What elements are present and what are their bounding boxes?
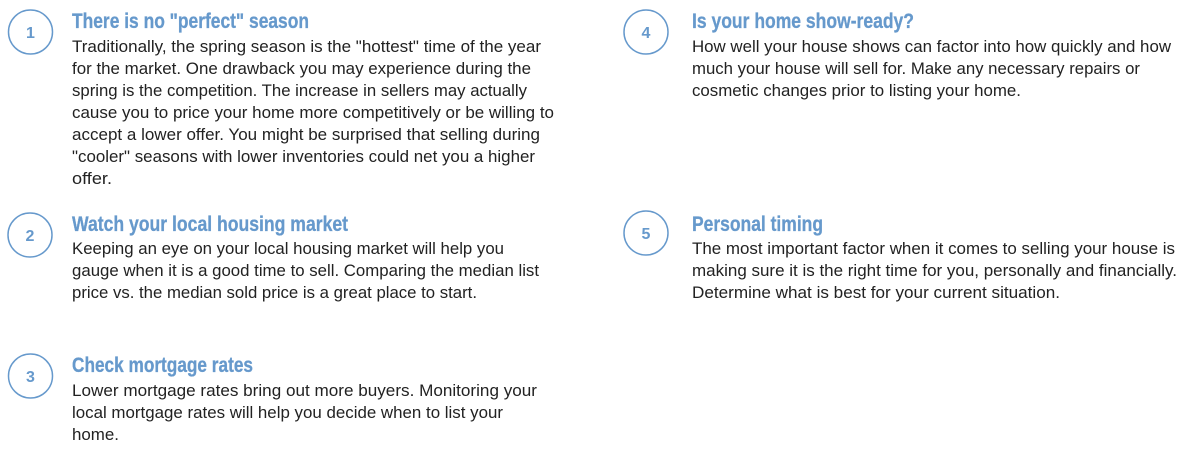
text block: tip 1: offer. (72, 170, 112, 188)
text block: tip 1: cause you to price your home more competitively or be willing to (72, 104, 554, 122)
text block: tip 4 (692, 38, 1171, 100)
icon: number 3 badge: 3 (26, 369, 35, 386)
text block: tip 5: The most important factor when it comes to selling your house is (692, 240, 1175, 258)
panel: tip 5 (624, 211, 1177, 302)
icon: number 3 badge (8, 354, 52, 398)
text block: tip 2: price vs. the median sold price is a great place to start. (72, 284, 477, 302)
text block: tip 1 (72, 38, 554, 188)
text block: tip 1: spring is the competition. The increase in sellers may actually (72, 82, 528, 100)
text block: tip 2: gauge when it is a good time to sell. Comparing the median list (72, 262, 539, 280)
icon: number 5 badge: 5 (642, 226, 651, 243)
heading: tip 2: Watch your local housing market (72, 213, 348, 236)
icon: number 1 badge (8, 10, 52, 54)
panel: tip 3 (8, 354, 538, 444)
text block: tip 2 (72, 240, 539, 302)
heading: tip 4: Is your home show-ready? (692, 10, 914, 33)
text block: tip 1: for the market. One drawback you may experience during the (72, 60, 531, 78)
text block: tip 5: making sure it is the right time for you, personally and financially. (692, 262, 1177, 280)
text block: tip 1: accept a lower offer. You might be surprised that selling during (72, 126, 540, 144)
icon: number 2 badge (8, 213, 52, 257)
panel: tip 2 (8, 213, 539, 302)
text block: tip 1: Traditionally, the spring season is the "hottest" time of the year (72, 38, 542, 56)
text block: tip 4: much your house will sell for. Make any necessary repairs or (692, 60, 1141, 78)
icon: number 2 badge: 2 (26, 228, 35, 245)
text block: tip 4: How well your house shows can factor into how quickly and how (692, 38, 1171, 56)
text block: tip 5: Determine what is best for your current situation. (692, 284, 1060, 302)
text block: tip 1: "cooler" seasons with lower inventories could net you a higher (72, 148, 536, 166)
text block: tip 4: cosmetic changes prior to listing your home. (692, 82, 1021, 100)
icon: number 1 badge: 1 (26, 25, 35, 42)
text block: tip 5 (692, 240, 1177, 302)
icon: number 4 badge: 4 (642, 25, 651, 42)
text block: tip 3: Lower mortgage rates bring out more buyers. Monitoring your (72, 382, 538, 400)
text block: tip 3 (72, 382, 538, 444)
panel: tip 4 (624, 10, 1171, 100)
icon: number 5 badge (624, 211, 668, 255)
panel: tip 1 (8, 10, 554, 188)
text block: tip 3: local mortgage rates will help you decide when to list your (72, 404, 504, 422)
text block: tip 3: home. (72, 426, 119, 444)
icon: number 4 badge (624, 10, 668, 54)
heading: tip 5: Personal timing (692, 213, 823, 236)
heading: tip 3: Check mortgage rates (72, 354, 253, 377)
text block: tip 2: Keeping an eye on your local housing market will help you (72, 240, 504, 258)
heading: tip 1: There is no "perfect" season (72, 10, 309, 33)
